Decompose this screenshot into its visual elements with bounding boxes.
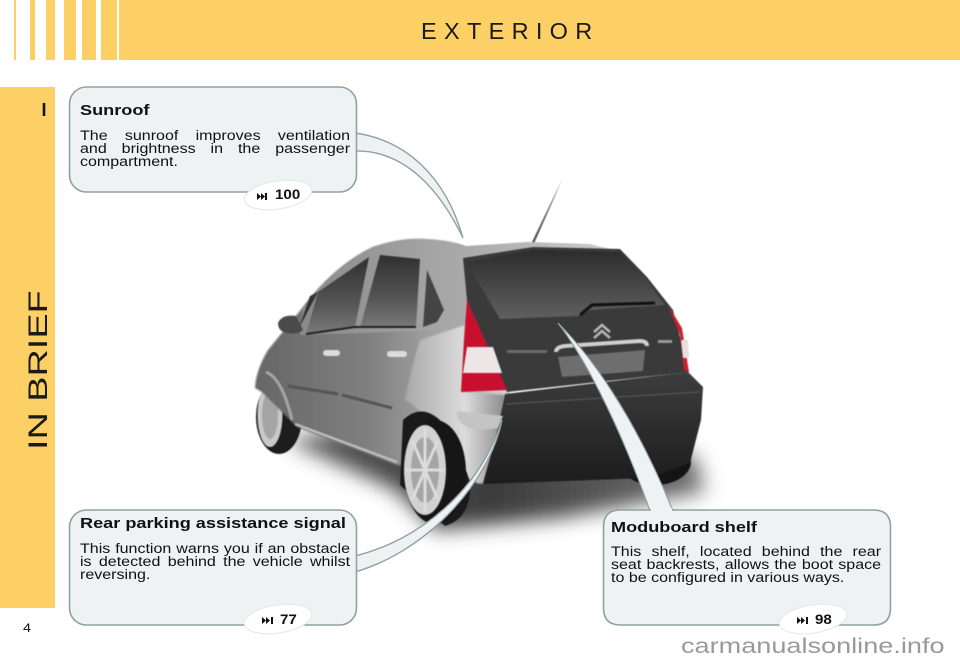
antenna	[530, 180, 562, 246]
badge chevrons	[594, 325, 610, 338]
page reference: 98: 98	[815, 612, 832, 627]
panel: moduboard box	[604, 510, 890, 625]
icon: skip arrow	[257, 193, 267, 200]
bumper trim	[457, 411, 503, 430]
title: EXTERIOR	[421, 18, 600, 44]
header band with stripes	[14, 0, 960, 60]
text: moduboard: to be configured in various ways.	[611, 570, 844, 585]
rear quarter panel	[405, 325, 505, 484]
heading: parking: Rear parking assistance signal	[80, 515, 346, 532]
pointer: sunroof	[355, 133, 463, 238]
door rub strip	[266, 372, 397, 462]
page reference: 100: 100	[275, 187, 300, 202]
rear bumper	[483, 372, 703, 484]
text: sunroof	[80, 128, 350, 169]
sidebar label: IN BRIEF	[23, 290, 53, 450]
page reference bubble	[242, 176, 314, 214]
heading: sunroof: Sunroof	[80, 102, 149, 119]
page reference bubble	[777, 600, 849, 638]
text: parking: This function warns you if an obstacle	[80, 541, 350, 556]
left tail light	[461, 300, 507, 392]
near wheel arch	[400, 411, 470, 526]
far wheel	[619, 439, 691, 485]
section marker: I	[42, 100, 47, 120]
tailgate chrome strip	[556, 341, 647, 352]
rear wiper	[580, 303, 655, 315]
rear left wheel	[256, 380, 302, 454]
right tail light	[668, 305, 689, 372]
callout: sunroof	[68, 86, 464, 238]
heading: moduboard: Moduboard shelf	[611, 519, 757, 536]
pointer: moduboard	[558, 323, 673, 511]
page number: 4	[23, 621, 31, 635]
text: sunroof: and brightness in the passenger	[80, 141, 350, 156]
page reference: 77: 77	[280, 612, 297, 627]
model badges	[507, 340, 672, 353]
panel: sunroof box	[70, 87, 356, 192]
ground shadow	[285, 420, 705, 530]
callout: rear parking assistance signal	[68, 420, 503, 634]
side windows	[296, 255, 444, 334]
number plate	[558, 350, 645, 377]
text: parking: is detected behind the vehicle whilst	[80, 554, 350, 569]
text: sunroof: The sunroof improves ventilation	[80, 128, 350, 143]
tailgate	[463, 247, 689, 392]
page reference bubble	[242, 600, 314, 638]
text: moduboard: This shelf, located behind the rear	[611, 544, 881, 559]
pointer: parking signal	[355, 420, 502, 572]
sidebar band	[0, 87, 55, 608]
car body side	[255, 239, 510, 484]
text: parking: reversing.	[80, 567, 150, 582]
icon: skip arrow	[262, 617, 273, 624]
roof and pillars	[300, 239, 622, 340]
text: moduboard	[611, 544, 881, 585]
icon: skip arrow	[797, 617, 808, 624]
text: sunroof: compartment.	[80, 154, 178, 169]
panel: parking box	[70, 510, 356, 625]
door mirror	[278, 316, 303, 334]
near wheel	[404, 420, 466, 524]
door handles	[323, 350, 407, 357]
text: parking	[80, 541, 350, 582]
text: moduboard: seat backrests, allows the boot space	[611, 557, 881, 572]
rear window	[466, 250, 665, 319]
watermark: carmanualsonline.info	[681, 635, 945, 658]
